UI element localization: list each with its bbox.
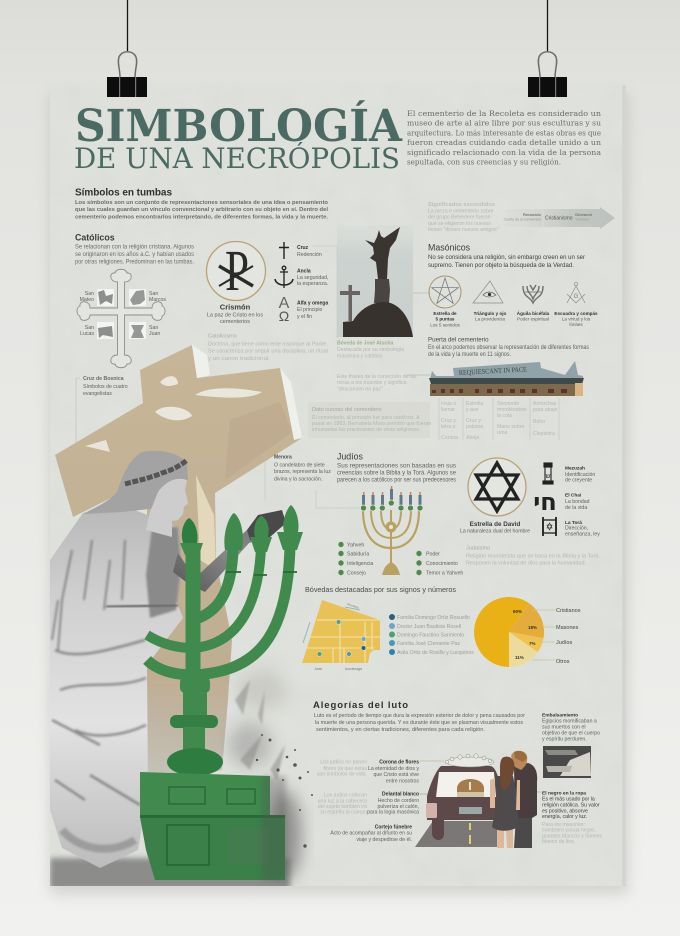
callout: significados escondidos	[428, 202, 499, 233]
text: estrella de David	[460, 521, 530, 534]
arrow: cronología de religiones	[504, 207, 615, 229]
text: alfa y omega: Alfa y omega	[297, 300, 328, 306]
table: signos de la puerta: y ave	[466, 407, 479, 413]
section: católicos: por otras religiones. Predominan en las tumbas.	[75, 260, 194, 266]
legend: bóvedas: Doctor Juan Bautista Rosell	[397, 624, 461, 630]
table: signos de la puerta: Mano sobre	[497, 424, 525, 430]
intro paragraph: significado relacionado con la vida de la persona	[407, 148, 601, 157]
chart: pie religiones: 60%	[513, 609, 522, 614]
section: judíos	[337, 452, 457, 484]
text: embalsamiento: Embalsamiento	[542, 712, 578, 718]
illustration: corona de flores	[445, 754, 494, 767]
chart: pie religiones: Otros	[556, 659, 570, 665]
icon: alfa y omega	[279, 295, 290, 324]
labels: evangelistas: Lucas	[80, 331, 94, 337]
icon: el chai: חי	[533, 488, 557, 516]
binder clip right	[528, 0, 567, 97]
icon: evangelista Juan	[129, 322, 146, 339]
text: el negro en la ropa: El negro en la ropa	[542, 790, 586, 796]
title: SIMBOLOGÍA	[75, 99, 403, 152]
callout: significados escondidos: del grupo Belvedere fueron	[428, 214, 491, 220]
legend: menorá: Poder	[426, 552, 440, 558]
icon: la torá	[543, 517, 556, 536]
panel: dato curioso: El cementerio, al principio fue para católicos. A	[312, 415, 420, 421]
chart: pie religiones: Cristianos	[556, 608, 581, 614]
text: masones vestimenta: Para los masones:	[542, 822, 585, 828]
heading: bóvedas destacadas: Bóvedas destacadas por sus signos y números	[305, 585, 456, 594]
captions: símbolos masónicos: Los 5 sentidos	[430, 322, 461, 328]
legend: menorá: Temor a Yahveh	[426, 570, 463, 576]
legend: menorá	[338, 542, 463, 576]
intro paragraph: El cementerio de la Recoleta es considerado un	[407, 109, 601, 118]
text: corona de flores: La eternidad de dios y	[368, 766, 419, 772]
legend: menorá: Yahveh	[347, 542, 364, 548]
text: puerta del cementerio: Puerta del cementerio	[428, 336, 489, 344]
callout: menora	[265, 454, 360, 508]
poster sheet	[50, 85, 626, 886]
labels: evangelistas: San	[149, 291, 158, 297]
text: catolicismo: Doctrina, que tiene como ente inspirque al Padre.	[208, 342, 328, 348]
icon: águila bicéfala	[523, 285, 543, 303]
statue arm	[173, 512, 284, 592]
text: judaísmo	[466, 546, 600, 566]
icon: mezuzah	[543, 463, 553, 484]
text: cortejo fúnebre	[330, 824, 412, 843]
text: la torá: Dirección,	[565, 526, 588, 532]
statue body and drapery	[50, 505, 183, 868]
icon: alfa y omega: Α	[279, 295, 290, 312]
captions: símbolos masónicos: Escuadra y compás	[554, 311, 598, 316]
icon: estrella de David	[468, 458, 526, 516]
ink splatter	[50, 670, 313, 890]
map: cementerio: Recoleta	[347, 602, 360, 610]
callout: menora: divina y la sacración.	[274, 476, 322, 482]
captions: símbolos masónicos: Estrella de	[433, 311, 457, 316]
captions: símbolos masónicos: 5 puntas	[436, 316, 455, 322]
text: alfa y omega	[297, 300, 328, 320]
captions: símbolos masónicos: Triángulo y ojo	[474, 311, 507, 316]
legend: bóvedas: Avila Ortiz de Rosillo y Lucquinos	[397, 650, 474, 656]
text: ancla: Ancla	[297, 268, 311, 274]
section: católicos	[75, 232, 194, 266]
section: símbolos en tumbas: cementerio podemos encontrarlos interpretando, de diferentes formas, la vida y la muerte.	[75, 214, 328, 220]
captions: símbolos masónicos: La providencia	[475, 316, 505, 322]
captions: símbolos masónicos: límites	[569, 322, 583, 327]
text: el chai: La bondad	[565, 499, 590, 505]
intro paragraph: fueron creadas cuidando cada detalle unido a un	[407, 138, 601, 147]
chart: pie religiones: Masones	[556, 625, 579, 631]
text: el chai: de la vida	[565, 505, 587, 511]
text: lema de la puerta: Este fraseo de la corrección de las	[337, 374, 417, 380]
illustration: pareja	[490, 751, 537, 848]
text: judíos flores: Los judíos no ponen	[320, 760, 367, 766]
statue chest	[146, 527, 181, 618]
table: signos de la puerta: Estrella	[466, 401, 483, 407]
text: catolicismo: Catolicismo	[208, 334, 237, 340]
panel: dato curioso: inhumadas las practicantes de otras religiones.	[312, 427, 420, 433]
arrow: cronología de religiones: Cristianismo	[545, 216, 573, 222]
icon: cruz de los evangelistas	[77, 269, 165, 368]
text: judíos luz: su espíritu al cuerpo	[320, 810, 367, 816]
text: estrella de David: La naturaleza dual del hombre	[460, 528, 530, 534]
text: la torá: enseñanza, ley	[565, 532, 600, 538]
table: signos de la puerta: Clepsidra	[533, 431, 555, 437]
text: mezuzah: Identificación	[565, 472, 595, 478]
statue: mujer	[50, 451, 286, 868]
table: signos de la puerta: letra p	[441, 424, 456, 430]
title	[74, 99, 403, 175]
photo: puerta requiescant in pace	[429, 361, 584, 396]
captions: símbolos masónicos: Águila bicéfala	[517, 310, 550, 316]
text: crismón: La paz de Cristo en los	[207, 312, 263, 318]
statue neck and face	[146, 479, 188, 537]
callout: cruz de Bosnia: Cruz de Bosnica	[83, 376, 124, 382]
chart: pie religiones: 18%	[528, 625, 537, 630]
panel: dato curioso: pasar en 1863, Bernabela Mora permitió que fueran	[312, 421, 431, 427]
text: judíos flores: flores ya que éstas	[323, 766, 367, 772]
tan cross background photo	[55, 345, 302, 790]
text: el negro en la ropa	[537, 790, 600, 820]
panel: dato curioso: Dato curioso del cementerio	[312, 407, 382, 413]
arrow: cronología de religiones: Renacido	[523, 212, 542, 217]
icon: estrella de 5 puntas	[429, 276, 461, 308]
callout: cruz de Bosnia: Símbolos de cuatro	[83, 384, 128, 390]
text: judaísmo: Responen la voluntad de dios para la humanidad.	[466, 560, 586, 566]
section: masónicos: Masónicos	[428, 242, 471, 252]
icon: ancla	[275, 266, 293, 288]
table: signos de la puerta: Serpiente	[497, 401, 519, 407]
section: símbolos en tumbas	[75, 188, 328, 220]
text: delantal blanco	[367, 792, 427, 816]
table: signos de la puerta: Antorchas	[533, 401, 557, 407]
intro paragraph: museo de arte al aire libre por sus esculturas y su	[407, 118, 601, 128]
text: cortejo fúnebre: Acto de acompañar al difunto en su	[330, 830, 412, 836]
icon: triángulo y ojo	[473, 281, 503, 303]
text: delantal blanco: pulveriza el calón,	[377, 804, 419, 810]
text: bóveda	[337, 340, 404, 360]
labels: evangelistas: San	[85, 325, 94, 331]
text: cruz: Cruz	[297, 245, 309, 251]
text: judíos luz: del sujeto también irá	[318, 804, 367, 810]
text: embalsamiento: sus muertos con el	[542, 724, 586, 730]
text: la torá	[565, 520, 600, 538]
text: lema de la puerta: "descansen en paz"	[337, 386, 383, 392]
icon: alfa y omega: Ω	[279, 308, 289, 324]
icon: mezuzah: ש	[545, 473, 551, 480]
statue wreath	[125, 460, 187, 484]
labels: evangelistas: Mateo	[80, 297, 94, 303]
section: alegorías del luto: la muerte de una persona querida. Y es durante éste que se plasman visualmente estos	[315, 720, 523, 726]
text: el negro en la ropa: religión católica. Su valor	[542, 802, 600, 808]
callout: menora: O candelabro de siete	[274, 462, 325, 468]
callout: significados escondidos: que se eligieron los nuevos	[428, 221, 491, 227]
text: ancla: La seguridad,	[297, 275, 328, 281]
table: signos de la puerta	[439, 398, 559, 441]
icon: menorá dorada	[360, 486, 423, 575]
intro paragraph: arquitectura. Lo más interesante de estas obras es que	[407, 128, 601, 138]
section: judíos: parecen a los católicos por ser sus predecesores	[337, 478, 456, 484]
callout: menora: Menora	[274, 454, 292, 460]
illustration: carroza fúnebre	[415, 766, 504, 847]
icon: escuadra y compás: G	[574, 294, 579, 300]
callout: cruz de Bosnia: evangelistas	[83, 391, 112, 397]
table: signos de la puerta: Hoja o	[441, 401, 456, 407]
text: ancla: la esperanza.	[297, 281, 328, 287]
table: signos de la puerta: urna	[497, 430, 507, 436]
text: corona de flores: Corona de flores	[379, 760, 419, 766]
text: masones vestimenta	[542, 822, 602, 845]
icon: evangelista Lucas	[97, 322, 114, 339]
chart: pie religiones: 7%	[529, 641, 536, 646]
text: cruz: Redención	[297, 252, 322, 258]
table: signos de la puerta: mordiéndose	[497, 407, 527, 413]
icon: crismón: P	[225, 238, 249, 303]
icon: escuadra y compás	[567, 282, 585, 303]
text: puerta del cementerio	[428, 336, 589, 358]
section: judíos: creencias sobre la Biblia y la Torá. Algunos se	[337, 470, 457, 476]
table: signos de la puerta: Búho	[533, 419, 545, 425]
labels: evangelistas	[80, 291, 166, 337]
section: católicos: Católicos	[75, 232, 115, 242]
section: símbolos en tumbas: Símbolos en tumbas	[75, 188, 172, 198]
icon: evangelista Marcos	[129, 289, 146, 306]
section: católicos: se originaron en los años a.C. y habían usados	[75, 252, 194, 258]
table: signos de la puerta: Abeja	[466, 435, 479, 441]
captions: símbolos masónicos	[430, 310, 598, 328]
photo: puerta requiescant in pace: REQUIESCANT IN PACE	[459, 365, 527, 377]
table: signos de la puerta: Corona	[441, 435, 458, 441]
text: judíos flores	[317, 760, 367, 778]
text: catolicismo: y un canon tradicional.	[208, 356, 270, 362]
photo: embalsamiento	[543, 746, 591, 778]
photo: bóveda de José Atucha	[312, 225, 430, 338]
text: cortejo fúnebre: Cortejo fúnebre	[375, 824, 412, 830]
map: cementerio: Azcuénaga	[345, 667, 362, 671]
text: embalsamiento: Egipcios momificaban a	[542, 718, 597, 724]
text: el chai	[565, 492, 590, 511]
section: alegorías del luto: Luto es el período de tiempo que dura la expresión exterior de dolor y pena causados por	[314, 713, 525, 719]
text: masones vestimenta: guantes blancos y faiones	[542, 834, 602, 840]
captions: símbolos masónicos: Poder espiritual	[517, 316, 549, 322]
icon: menorá verde	[147, 505, 303, 776]
text: catolicismo	[208, 334, 328, 362]
table: signos de la puerta: paloma	[466, 424, 483, 430]
text: estrella de David: Estrella de David	[470, 521, 521, 528]
table: signos de la puerta: Cruz y	[466, 418, 481, 424]
table: signos de la puerta: para abajo	[533, 407, 558, 413]
icon: crismón	[206, 238, 266, 303]
text: lema de la puerta	[337, 374, 430, 392]
text: embalsamiento	[542, 712, 600, 742]
text: masones vestimenta: sombrero yoruja negro,	[542, 828, 596, 834]
section: alegorías del luto	[313, 700, 525, 733]
legend: bóvedas: Familia José Clemente Paz	[397, 641, 461, 647]
callout: significados escondidos: Significados escondidos	[428, 202, 495, 208]
labels: evangelistas: San	[149, 325, 158, 331]
intro paragraph: sepultada, con sus creencias y su religión.	[407, 158, 561, 166]
text: el negro en la ropa: Es el más usado por la	[542, 796, 595, 802]
legend: menorá: Consejo	[347, 570, 366, 576]
text: judíos flores: son símbolos de vida.	[317, 772, 367, 778]
text: mezuzah	[565, 466, 595, 484]
text: masones vestimenta: blanco de lino.	[542, 839, 575, 845]
section: católicos: Se relacionan con la religión cristiana. Algunos	[75, 244, 194, 250]
panel: dato curioso	[308, 402, 431, 438]
text: la torá: La Torá	[565, 520, 582, 526]
section: masónicos: supremo. Tienen por objeto la búsqueda de la Verdad.	[428, 262, 574, 269]
legend: menorá: Inteligencia	[347, 561, 373, 567]
captions: símbolos masónicos: La virtud y los	[562, 316, 591, 322]
legend: bóvedas: Familia Domingo Ortiz Rosuello	[397, 615, 470, 621]
text: delantal blanco: para la logia masónica	[367, 810, 419, 816]
text: judíos luz	[318, 792, 367, 816]
text: embalsamiento: y espíritu perduren.	[542, 736, 587, 742]
statue hand	[247, 510, 286, 540]
text: crismón: cementerios	[220, 319, 250, 325]
table: signos de la puerta: la cola	[497, 413, 512, 419]
text: bóveda: Destacada por su simbología	[337, 347, 404, 353]
section: alegorías del luto: sentimientos, y en ciertas tradiciones, diferentes para cada religión.	[316, 727, 485, 733]
text: alfa y omega: y el fin	[297, 314, 312, 320]
text: crismón: Crismón	[220, 302, 251, 312]
text: judíos luz: una luz a la cabecera	[318, 798, 367, 804]
chart: pie religiones	[474, 597, 581, 667]
text: crismón	[207, 302, 263, 325]
callout: significados escondidos: tienen "dioses nuevos amigos"	[428, 227, 499, 233]
labels: evangelistas: Juan	[149, 331, 160, 337]
callout: significados escondidos: La pieza e cementerio sobre	[428, 208, 494, 214]
text: corona de flores: que Cristo está vive	[373, 772, 419, 778]
text: corona de flores: entre nosotros	[386, 778, 419, 784]
text: bóveda: masónica y católica	[337, 354, 382, 360]
text: puerta del cementerio: En el arco podemos observar la representación de diferentes formas	[428, 345, 589, 351]
section: símbolos en tumbas: Los símbolos son un conjunto de representaciones sensoriales de una idea o pensamiento	[75, 200, 328, 206]
intro paragraph	[407, 109, 601, 166]
section: judíos: Sus representaciones son basadas en sus	[337, 464, 456, 470]
legend: bóvedas: Domingo Faustino Sarmiento	[397, 632, 464, 638]
table: signos de la puerta: Cruz y	[441, 418, 456, 424]
legend: bóvedas	[389, 614, 474, 656]
text: corona de flores	[368, 760, 444, 784]
text: mezuzah: Mezuzah	[565, 466, 585, 472]
section: masónicos: No se considera una religión, sin embargo creen en un ser	[428, 254, 585, 261]
text: el chai: El Chai	[565, 492, 581, 498]
binder clip left	[107, 0, 147, 97]
icon: evangelista Mateo	[97, 289, 114, 306]
arrow: cronología de religiones: Giovanni	[575, 212, 592, 217]
text: el negro en la ropa: es positivo, absorve	[542, 808, 588, 814]
text: catolicismo: Se caracteriza por seguir una disciplina, un ritual	[208, 348, 328, 354]
text: cruz	[297, 245, 322, 258]
pedestal verde	[140, 772, 286, 880]
icon: cruz	[279, 242, 289, 259]
text: judaísmo: Judaísmo	[466, 546, 490, 552]
statue folds	[52, 540, 146, 849]
arrow: cronología de religiones: Tradición	[575, 218, 589, 222]
text: el negro en la ropa: energía, calor y luz.	[542, 814, 587, 820]
map: cementerio	[302, 600, 380, 671]
map: cementerio: Junín	[314, 667, 322, 671]
labels: evangelistas: San	[85, 291, 94, 297]
chart: pie religiones: 11%	[515, 655, 524, 660]
text: bóveda: Bóveda de José Atucha	[337, 340, 393, 346]
title: DE UNA NECRÓPOLIS	[74, 141, 400, 175]
text: judíos luz: Los judíos colocan	[324, 792, 367, 798]
table: signos de la puerta: llamar	[441, 407, 455, 413]
section: símbolos en tumbas: que las cuales guardan un vínculo convencional y arbitrario con su objeto en sí. Dentro del	[75, 207, 328, 213]
text: mezuzah: de creyente	[565, 478, 592, 484]
arrow: cronología de religiones: Cuarta de la humanidad	[504, 218, 541, 222]
callout: menora: brazos, representa la luz	[274, 469, 331, 475]
legend: menorá: Conocimiento	[426, 561, 458, 567]
labels: evangelistas: Marcos	[149, 297, 166, 303]
section: masónicos	[428, 242, 585, 269]
text: embalsamiento: objetivo de que el cuerpo	[542, 730, 600, 736]
text: ancla	[297, 268, 328, 287]
legend: menorá: Sabiduría	[347, 552, 369, 558]
section: alegorías del luto: Alegorías del luto	[313, 700, 408, 711]
chart: pie religiones: Judíos	[556, 640, 572, 646]
text: puerta del cementerio: de la vida y la muerte en 11 signos.	[428, 352, 511, 358]
text: judaísmo: Religión monoteísta que se basa en la Biblia y la Torá.	[466, 554, 600, 560]
text: delantal blanco: Delantal blanco	[382, 792, 419, 798]
callout: cruz de Bosnia	[76, 376, 128, 445]
section: judíos: Judíos	[337, 452, 364, 462]
text: alfa y omega: El principio	[297, 307, 322, 313]
text: cortejo fúnebre: viaje y despedirse de él.	[356, 837, 412, 843]
statue hair	[83, 451, 188, 514]
text: delantal blanco: Hecho de cordero	[378, 798, 419, 804]
poster shadow	[50, 94, 628, 894]
text: lema de la puerta: miras a los muertos y significa	[337, 380, 407, 386]
